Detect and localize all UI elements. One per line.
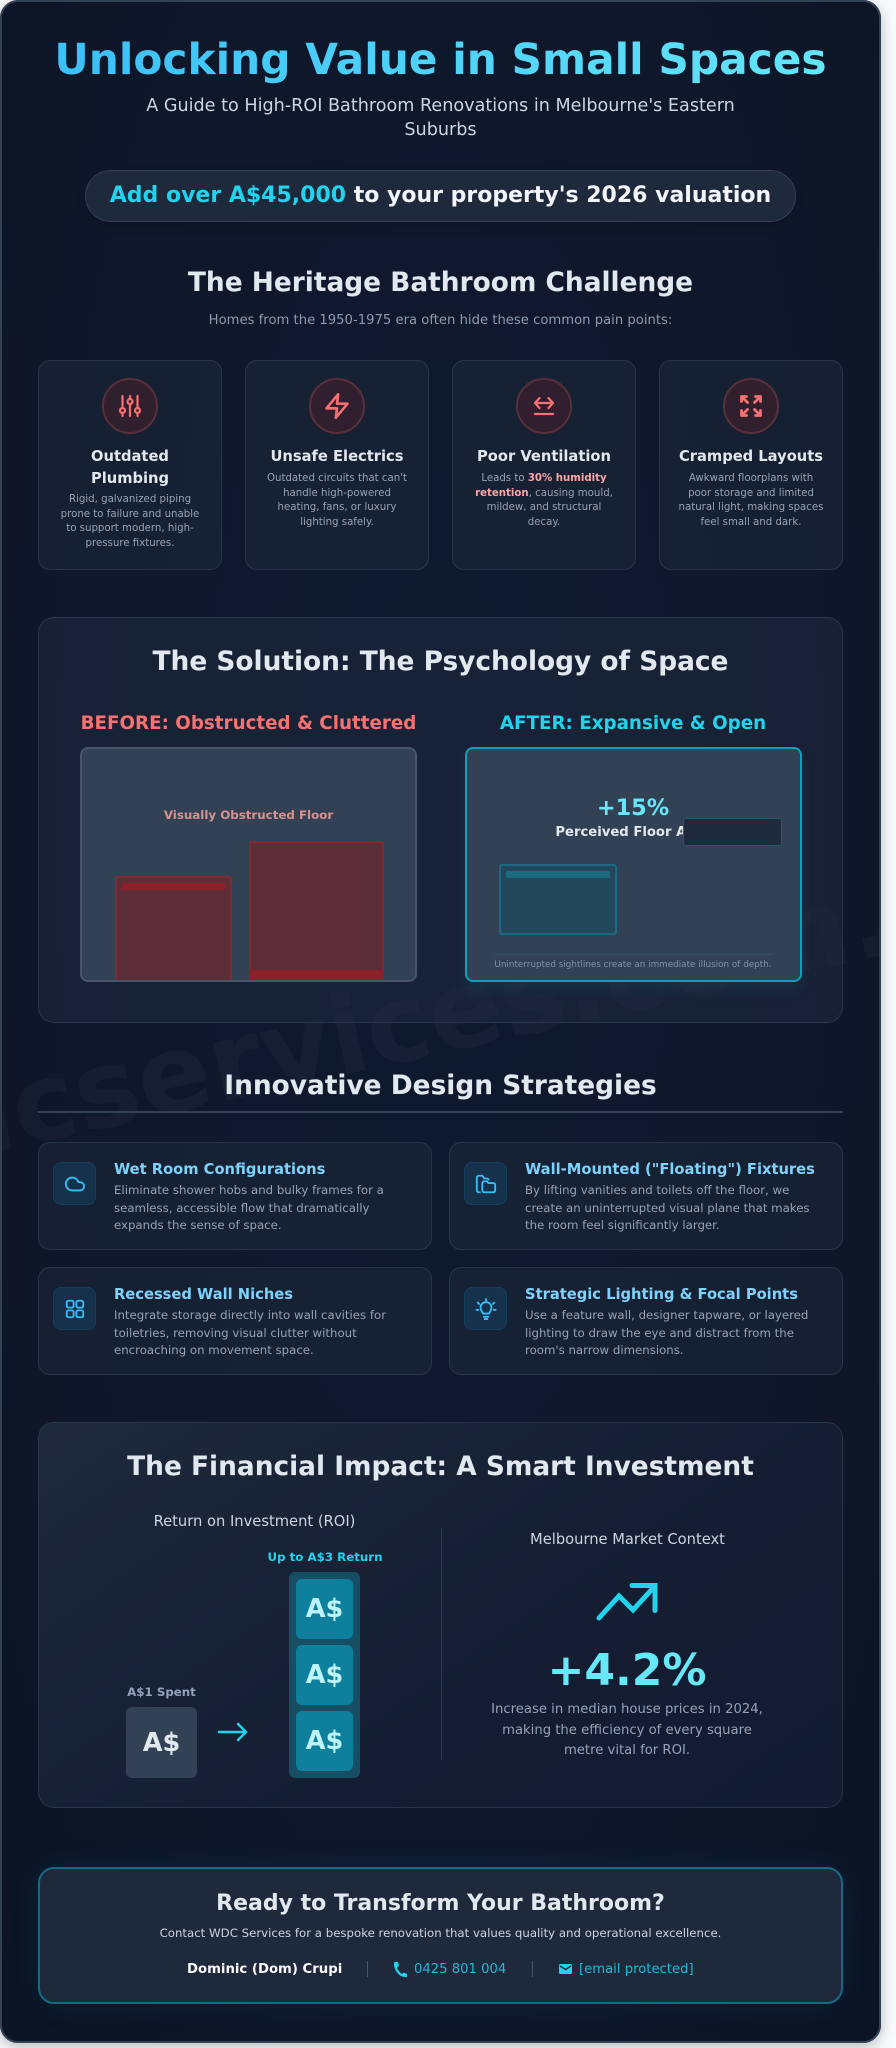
icon: phone bbox=[394, 1962, 407, 1977]
card text: prone to failure and unable bbox=[61, 509, 199, 520]
perceived floor area stat: Perceived Floor Area bbox=[555, 825, 711, 840]
card text: Rigid, galvanized piping bbox=[69, 494, 191, 505]
icon: sliders bbox=[102, 378, 158, 434]
return tile 1 bbox=[296, 1579, 353, 1639]
subtitle bbox=[146, 96, 735, 140]
card text: feel small and dark. bbox=[700, 517, 802, 528]
strategy text: lighting to draw the eye and distract from the bbox=[525, 1326, 794, 1340]
card text: mildew, and structural bbox=[487, 502, 601, 513]
heading: challenge: The Heritage Bathroom Challenge bbox=[188, 267, 693, 298]
card text: Awkward floorplans with bbox=[689, 473, 813, 484]
panel: cramped layouts bbox=[659, 360, 843, 570]
market text: Increase in median house prices in 2024, bbox=[491, 1702, 763, 1717]
floating vanity fixture bbox=[498, 864, 616, 935]
before label: BEFORE: Obstructed & Cluttered bbox=[81, 713, 416, 734]
icon: cloud bbox=[53, 1162, 96, 1205]
heading: financial: The Financial Impact: A Smart Investment bbox=[127, 1451, 754, 1482]
card text bbox=[61, 494, 199, 549]
return tile 3: A$ bbox=[306, 1726, 343, 1756]
icon: trending up bbox=[596, 1583, 658, 1620]
perceived floor area stat bbox=[555, 795, 711, 840]
cta text: Contact WDC Services for a bespoke renovation that values quality and operational excellence. bbox=[160, 1926, 721, 1940]
card title: Outdated bbox=[91, 448, 169, 465]
market text: metre vital for ROI. bbox=[564, 1743, 690, 1758]
email: [email protected] bbox=[579, 1962, 694, 1977]
return tile 2: A$ bbox=[306, 1660, 343, 1690]
icon: lightning bbox=[309, 378, 365, 434]
spent tile bbox=[126, 1707, 197, 1778]
card text: heating, fans, or luxury bbox=[278, 502, 396, 513]
card text: handle high-powered bbox=[283, 488, 391, 499]
panel: unsafe electrics bbox=[245, 360, 429, 570]
strategy: wall niches bbox=[38, 1267, 432, 1375]
shower hob fixture bbox=[115, 876, 232, 986]
sightlines caption: Uninterrupted sightlines create an immediate illusion of depth. bbox=[494, 960, 772, 970]
subtitle: Suburbs bbox=[404, 120, 477, 140]
arrow bbox=[218, 1722, 248, 1742]
obstructed floor label: Visually Obstructed Floor bbox=[164, 808, 333, 822]
strategy text: the room feel significantly larger. bbox=[525, 1218, 720, 1232]
spent label: A$1 Spent bbox=[127, 1685, 196, 1699]
card text: poor storage and limited bbox=[688, 488, 814, 499]
value callout pill: Add over A$45,000 to your property's 2026 valuation bbox=[110, 183, 771, 208]
card text: natural light, making spaces bbox=[679, 502, 823, 513]
card text bbox=[475, 473, 613, 528]
card text: retention, causing mould, bbox=[475, 488, 613, 499]
icon: folders bbox=[464, 1162, 507, 1205]
after illustration bbox=[464, 747, 802, 982]
card title: Unsafe Electrics bbox=[270, 448, 403, 465]
strategy text bbox=[114, 1183, 384, 1232]
card text: Leads to 30% humidity bbox=[481, 473, 607, 484]
icon: light bulb bbox=[464, 1287, 507, 1330]
card text: decay. bbox=[528, 517, 560, 528]
return tile 2 bbox=[296, 1645, 353, 1705]
panel: psychology of space bbox=[38, 617, 843, 1023]
card title: Cramped Layouts bbox=[679, 448, 823, 465]
market stat: +4.2% bbox=[548, 1645, 706, 1696]
sightlines caption bbox=[494, 954, 772, 974]
card text bbox=[679, 473, 823, 528]
strategy text: expands the sense of space. bbox=[114, 1218, 282, 1232]
strategy: wet room bbox=[38, 1142, 432, 1250]
strategy text: Use a feature wall, designer tapware, or layered bbox=[525, 1308, 808, 1322]
strategy text: toiletries, removing visual clutter without bbox=[114, 1326, 357, 1340]
return stack bbox=[289, 1572, 360, 1778]
contact name: Dominic (Dom) Crupi bbox=[187, 1962, 342, 1977]
strategy text: By lifting vanities and toilets off the floor, we bbox=[525, 1183, 789, 1197]
return tile 3 bbox=[296, 1711, 353, 1771]
return tile 1: A$ bbox=[306, 1594, 343, 1624]
card text: lighting safely. bbox=[300, 517, 374, 528]
strategy text: encroaching on movement space. bbox=[114, 1343, 314, 1357]
strategy text: Eliminate shower hobs and bulky frames for a bbox=[114, 1183, 384, 1197]
icon: mail bbox=[559, 1964, 572, 1974]
strategy text: Integrate storage directly into wall cavities for bbox=[114, 1308, 386, 1322]
call to action panel bbox=[38, 1867, 843, 2004]
strategy title: Wall-Mounted ("Floating") Fixtures bbox=[525, 1161, 815, 1178]
strategy text bbox=[114, 1308, 386, 1357]
strategy: lighting bbox=[449, 1267, 843, 1375]
strategy title: Recessed Wall Niches bbox=[114, 1286, 293, 1303]
heading: solution: The Solution: The Psychology of Space bbox=[153, 646, 728, 677]
panel: outdated plumbing bbox=[38, 360, 222, 570]
before illustration bbox=[80, 747, 417, 982]
icon: expand arrows bbox=[723, 378, 779, 434]
phone number: 0425 801 004 bbox=[414, 1962, 506, 1977]
bulky vanity fixture bbox=[249, 841, 384, 986]
market text bbox=[491, 1702, 763, 1758]
value callout pill bbox=[85, 170, 796, 222]
market label: Melbourne Market Context bbox=[530, 1531, 725, 1548]
card title: Poor Ventilation bbox=[477, 448, 611, 465]
challenge intro: Homes from the 1950-1975 era often hide these common pain points: bbox=[209, 313, 672, 328]
icon: grid bbox=[53, 1287, 96, 1330]
card text: pressure fixtures. bbox=[86, 538, 174, 549]
spent tile: A$ bbox=[143, 1728, 180, 1758]
card text: Outdated circuits that can't bbox=[267, 473, 407, 484]
strategy: floating fixtures bbox=[449, 1142, 843, 1250]
card title bbox=[91, 448, 169, 486]
panel: financial impact bbox=[38, 1422, 843, 1808]
icon: airflow bbox=[516, 378, 572, 434]
strategy text bbox=[525, 1183, 810, 1232]
after label: AFTER: Expansive & Open bbox=[500, 713, 766, 734]
panel: poor ventilation bbox=[452, 360, 636, 570]
heading: strategies: Innovative Design Strategies bbox=[224, 1070, 657, 1101]
strategy title: Wet Room Configurations bbox=[114, 1161, 325, 1178]
strategy text: room's narrow dimensions. bbox=[525, 1343, 684, 1357]
roi chart bbox=[126, 1550, 382, 1778]
cta heading: Ready to Transform Your Bathroom? bbox=[216, 1891, 665, 1916]
strategy text bbox=[525, 1308, 808, 1357]
floating toilet fixture bbox=[682, 818, 782, 846]
strategy text: create an uninterrupted visual plane that makes bbox=[525, 1201, 810, 1215]
card text: to support modern, high- bbox=[66, 523, 194, 534]
card text bbox=[267, 473, 407, 528]
return label: Up to A$3 Return bbox=[268, 1550, 382, 1564]
strategy title: Strategic Lighting & Focal Points bbox=[525, 1286, 798, 1303]
market text: making the efficiency of every square bbox=[502, 1722, 752, 1738]
strategy text: seamless, accessible flow that dramatically bbox=[114, 1201, 369, 1215]
perceived floor area stat: +15% bbox=[597, 795, 669, 821]
card title: Plumbing bbox=[91, 470, 169, 486]
subtitle: A Guide to High-ROI Bathroom Renovations in Melbourne's Eastern bbox=[146, 96, 735, 116]
roi label: Return on Investment (ROI) bbox=[154, 1513, 355, 1530]
